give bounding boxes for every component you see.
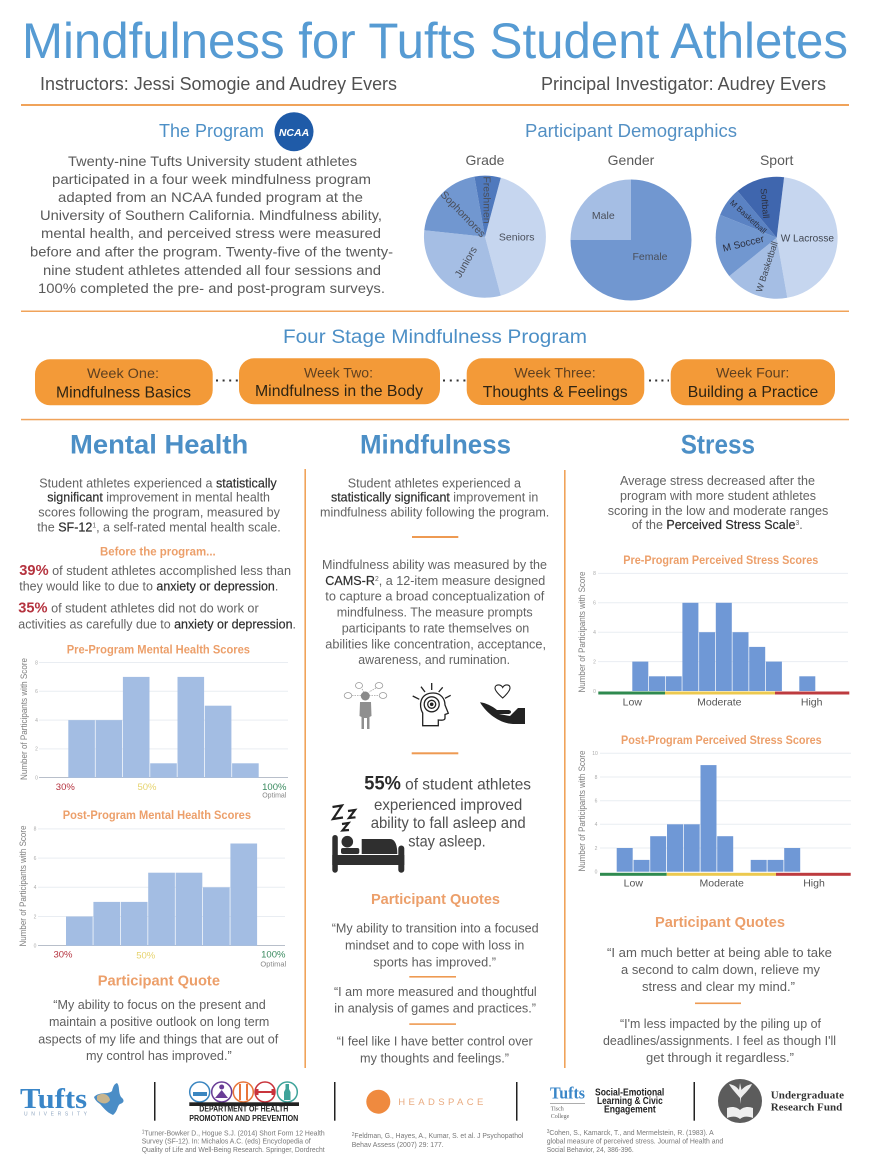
logo: Undergraduate Research Fund bbox=[718, 1079, 844, 1123]
CAMS-R description: mindfulness. The measure prompts bbox=[337, 604, 533, 619]
reference 2 bbox=[352, 1132, 524, 1149]
pie chart: grade bbox=[424, 152, 546, 298]
mental health summary: , a self-rated mental health scale. bbox=[96, 520, 281, 535]
program description: mental health, and perceived stress were measured bbox=[41, 225, 381, 241]
quotes: stress and clear my mind.” bbox=[642, 979, 795, 994]
pie chart: sport: Softball bbox=[759, 188, 771, 219]
reference 3: global measure of perceived stress. Journal of Health and bbox=[547, 1138, 723, 1146]
heading: mindfulness: Mindfulness bbox=[360, 429, 511, 459]
pie chart: sport: W Basketball bbox=[754, 240, 780, 293]
statistics: 39% of student athletes accomplished less than bbox=[19, 562, 291, 579]
stage: week four bbox=[671, 359, 835, 405]
bar chart: pre-program mental health: 6 bbox=[35, 689, 38, 695]
icon: bed bbox=[332, 835, 404, 873]
bar chart: pre-program perceived stress: Number of Participants with Score bbox=[577, 572, 587, 692]
stage: week three: Thoughts & Feelings bbox=[483, 384, 628, 401]
heading: participant quotes: Participant Quotes bbox=[371, 891, 500, 908]
pie chart: sport: M Basketball bbox=[728, 198, 768, 236]
before the program heading: Before the program... bbox=[100, 547, 216, 559]
bar chart: post-program mental health: 8 bbox=[34, 827, 37, 833]
stage: week four: Week Four: bbox=[716, 365, 789, 381]
stress summary: scoring in the low and moderate ranges bbox=[608, 503, 829, 518]
program description: before and after the program. Twenty-five of the twenty- bbox=[30, 244, 393, 260]
logo: Tufts University: Tufts bbox=[20, 1083, 87, 1115]
stage: week three: Week Three: bbox=[514, 365, 596, 381]
heading: four stage mindfulness program: Four Stage Mindfulness Program bbox=[283, 327, 587, 348]
mindfulness summary bbox=[320, 475, 549, 520]
bar chart: pre-program perceived stress: Moderate bbox=[697, 697, 742, 709]
connector bbox=[443, 380, 466, 382]
mental health summary: the SF-12 bbox=[37, 520, 94, 535]
icon: NCAA logo: NCAA bbox=[279, 127, 309, 139]
bar chart: post-program mental health: Number of Participants with Score bbox=[18, 826, 28, 946]
program description: adapted from an NCAA funded program at the bbox=[58, 189, 363, 205]
mental health summary: 1 bbox=[92, 523, 96, 530]
principal investigator: Principal Investigator: Audrey Evers bbox=[541, 74, 826, 94]
connector bbox=[216, 380, 238, 382]
bar chart: pre-program mental health: 100% bbox=[262, 782, 287, 793]
logo: Tufts Tisch College SEL: College bbox=[551, 1114, 570, 1120]
logo: Tufts Tisch College SEL: Tisch bbox=[551, 1107, 564, 1113]
reference 3: Cohen, S., Kamarck, T., and Mermelstein, R. (1983). A bbox=[549, 1130, 714, 1137]
bar chart: post-program perceived stress: Moderate bbox=[700, 878, 744, 890]
bar chart: pre-program mental health: 2 bbox=[35, 747, 38, 753]
logo: Department of Health Promotion and Prevention bbox=[189, 1082, 299, 1123]
logo: Tufts Tisch College SEL: Learning & Civic bbox=[597, 1095, 663, 1107]
logo: Department of Health Promotion and Prevention: PROMOTION AND PREVENTION bbox=[189, 1114, 298, 1123]
bar chart: pre-program mental health: Pre-Program Mental Health Scores bbox=[67, 644, 250, 656]
quotes: mindset and to cope with loss in bbox=[345, 937, 524, 952]
pie chart: sport: Sport bbox=[760, 152, 794, 168]
sleep statistic: 55% of student athletes bbox=[364, 773, 531, 794]
pie chart: grade: Sophomores bbox=[438, 189, 488, 240]
heading: mental health: Mental Health bbox=[70, 429, 248, 459]
mindfulness summary: statistically significant improvement in bbox=[331, 490, 538, 505]
panel: stress bbox=[577, 429, 851, 1065]
reference 1: Turner-Bowker D., Hogue S.J. (2014) Short Form 12 Health bbox=[144, 1130, 325, 1137]
reference 2: 2 bbox=[352, 1132, 355, 1138]
CAMS-R description bbox=[322, 557, 547, 667]
stress summary: program with more student athletes bbox=[620, 488, 816, 503]
sleep statistic: experienced improved bbox=[374, 797, 522, 814]
pie chart: sport bbox=[716, 152, 838, 299]
panel: the program bbox=[30, 112, 393, 296]
logo: Department of Health Promotion and Prevention: DEPARTMENT OF HEALTH bbox=[199, 1105, 288, 1114]
pie chart: gender bbox=[570, 152, 691, 300]
quotes: “I am more measured and thoughtful bbox=[334, 984, 537, 999]
pie chart: grade: Juniors bbox=[453, 245, 480, 280]
reference 3 bbox=[547, 1129, 723, 1154]
pie chart: gender: Female bbox=[632, 251, 668, 263]
program description: participated in a four week mindfulness program bbox=[52, 171, 371, 187]
quote: maintain a positive outlook on long term bbox=[49, 1014, 269, 1029]
bar chart: post-program perceived stress: High bbox=[803, 878, 825, 890]
bar chart: post-program mental health bbox=[18, 810, 287, 968]
bar chart: post-program mental health: 50% bbox=[136, 950, 156, 961]
logo: Tufts University bbox=[20, 1083, 124, 1118]
stress summary: Average stress decreased after the bbox=[620, 473, 815, 488]
reference 3: Social Behavior, 24, 386-396. bbox=[547, 1147, 634, 1154]
program description: 100% completed the pre- and post-program surveys. bbox=[38, 280, 385, 296]
bar chart: post-program mental health: Optimal bbox=[260, 960, 287, 968]
statistics: activities as carefully due to anxiety or depression. bbox=[18, 616, 296, 631]
bar chart: pre-program mental health: Number of Participants with Score bbox=[19, 658, 29, 780]
icon: NCAA logo bbox=[274, 112, 314, 151]
reference 1: 1 bbox=[142, 1129, 145, 1135]
CAMS-R description: CAMS-R bbox=[325, 573, 375, 588]
mental health summary: Student athletes experienced a statistically bbox=[39, 475, 277, 490]
heading: participant demographics: Participant Demographics bbox=[525, 121, 737, 141]
icon: zzz bbox=[332, 806, 356, 830]
quotes: get through it regardless.” bbox=[646, 1050, 794, 1065]
stage: week one: Week One: bbox=[87, 365, 159, 381]
icon: head with target bbox=[413, 683, 451, 726]
quotes: “I am much better at being able to take bbox=[607, 945, 832, 960]
pie chart: grade: Seniors bbox=[499, 232, 535, 244]
mindfulness summary: mindfulness ability following the program. bbox=[320, 505, 549, 520]
bar chart: pre-program perceived stress: 6 bbox=[593, 601, 596, 607]
reference 1 bbox=[142, 1129, 325, 1154]
mental health summary: scores following the program, measured by bbox=[38, 505, 280, 520]
bar chart: post-program mental health: 2 bbox=[34, 914, 37, 920]
quote: “My ability to focus on the present and bbox=[53, 997, 266, 1012]
logo: Tufts Tisch College SEL: Tufts bbox=[550, 1083, 585, 1102]
pie chart: gender: Gender bbox=[608, 152, 655, 168]
bar chart: pre-program perceived stress bbox=[577, 555, 849, 709]
bar chart: pre-program perceived stress: 8 bbox=[593, 571, 596, 577]
sleep statistic bbox=[364, 773, 531, 851]
quotes bbox=[332, 921, 539, 1066]
icon: hand holding heart bbox=[480, 685, 525, 724]
quotes: a second to calm down, relieve my bbox=[621, 962, 820, 977]
program description: Twenty-nine Tufts University student athletes bbox=[68, 153, 357, 169]
panel: four stage program bbox=[35, 327, 835, 405]
bar chart: pre-program mental health: 8 bbox=[35, 660, 38, 666]
quotes: sports has improved.” bbox=[373, 955, 496, 970]
quote bbox=[38, 997, 279, 1063]
bar chart: post-program perceived stress: 0 bbox=[595, 870, 598, 876]
logo: Undergraduate Research Fund: Research Fund bbox=[771, 1102, 842, 1114]
bar chart: pre-program perceived stress: Pre-Program Perceived Stress Scores bbox=[623, 555, 818, 567]
quotes bbox=[603, 945, 836, 1065]
logo: Headspace bbox=[366, 1090, 483, 1114]
bar chart: pre-program mental health: 50% bbox=[137, 782, 157, 793]
CAMS-R description: abilities like concentration, acceptance, bbox=[325, 636, 546, 651]
connector bbox=[649, 380, 669, 382]
bar chart: post-program perceived stress: Post-Program Perceived Stress Scores bbox=[621, 735, 822, 747]
heading: participant quotes: Participant Quotes bbox=[655, 914, 785, 931]
instructors: Instructors: Jessi Somogie and Audrey Evers bbox=[40, 74, 397, 94]
stage: week one: Mindfulness Basics bbox=[56, 385, 191, 402]
bar chart: post-program mental health: 30% bbox=[53, 949, 73, 960]
stress summary: 3 bbox=[795, 520, 799, 527]
bar chart: pre-program perceived stress: High bbox=[801, 697, 823, 709]
heading: stress: Stress bbox=[681, 429, 755, 459]
bar chart: post-program perceived stress: 8 bbox=[595, 775, 598, 781]
bar chart: pre-program perceived stress: 4 bbox=[593, 630, 596, 636]
title: Mindfulness for Tufts Student Athletes bbox=[22, 13, 848, 69]
CAMS-R description: to capture a broad conceptualization of bbox=[325, 588, 545, 603]
reference 1: Survey (SF-12). In: Michalos A.C. (eds) Encyclopedia of bbox=[142, 1139, 311, 1146]
logo: Headspace: HEADSPACE bbox=[398, 1097, 483, 1108]
stress summary bbox=[608, 473, 829, 532]
quotes: “I'm less impacted by the piling up of bbox=[620, 1016, 821, 1031]
bar chart: post-program mental health: 0 bbox=[34, 944, 37, 950]
pie chart: sport: W Lacrosse bbox=[781, 232, 834, 244]
bar chart: post-program perceived stress: 4 bbox=[595, 822, 598, 828]
statistics: they would like to due to anxiety or depression. bbox=[19, 579, 278, 594]
reference 3: 3 bbox=[547, 1129, 550, 1135]
stage: week one bbox=[35, 359, 213, 405]
CAMS-R description: Mindfulness ability was measured by the bbox=[322, 557, 547, 572]
logo: Tufts Tisch College SEL: Engagement bbox=[604, 1104, 656, 1116]
logo: Tufts Tisch College SEL bbox=[550, 1083, 664, 1120]
sleep statistic: stay asleep. bbox=[408, 834, 486, 851]
pie chart: sport: M Soccer bbox=[722, 234, 766, 255]
heading: participant quote: Participant Quote bbox=[98, 972, 220, 989]
pie chart: gender: Male bbox=[592, 210, 615, 222]
bar chart: post-program perceived stress bbox=[577, 735, 851, 890]
quotes: deadlines/assignments. I feel as though I'll bbox=[603, 1033, 836, 1048]
icon: person with thoughts bbox=[344, 682, 387, 729]
CAMS-R description: participants to rate themselves on bbox=[342, 620, 529, 635]
reference 2: Behav Assess (2007) 29: 177. bbox=[352, 1142, 444, 1149]
mindfulness summary: Student athletes experienced a bbox=[348, 475, 522, 490]
bar chart: post-program perceived stress: 10 bbox=[592, 751, 598, 757]
CAMS-R description: , a 12-item measure designed bbox=[379, 573, 545, 588]
CAMS-R description: awareness, and rumination. bbox=[358, 652, 510, 667]
CAMS-R description: 2 bbox=[375, 576, 379, 583]
sleep statistic: ability to fall asleep and bbox=[371, 815, 526, 832]
statistics bbox=[18, 562, 296, 631]
panel: footer logos and references bbox=[20, 1079, 844, 1154]
bar chart: post-program perceived stress: 2 bbox=[595, 846, 598, 852]
stage: week two bbox=[239, 358, 440, 404]
quotes: “I feel like I have better control over bbox=[337, 1033, 533, 1048]
panel: mental health bbox=[18, 429, 296, 1063]
quotes: my thoughts and feelings.” bbox=[360, 1051, 509, 1066]
bar chart: post-program mental health: 6 bbox=[34, 856, 37, 862]
bar chart: pre-program perceived stress: 0 bbox=[593, 689, 596, 695]
bar chart: post-program perceived stress: Low bbox=[624, 878, 643, 890]
quote: my control has improved.” bbox=[86, 1048, 232, 1063]
stress summary: . bbox=[799, 517, 803, 532]
bar chart: post-program mental health: 100% bbox=[261, 949, 286, 960]
panel: mindfulness bbox=[320, 429, 549, 1066]
bar chart: pre-program perceived stress: Low bbox=[623, 697, 642, 709]
logo: Tufts University: UNIVERSITY bbox=[24, 1112, 88, 1118]
statistics: 35% of student athletes did not do work or bbox=[18, 600, 259, 617]
stress summary: of the Perceived Stress Scale bbox=[632, 517, 801, 532]
pie chart: grade: Freshmen bbox=[481, 176, 493, 224]
stage: week three bbox=[467, 358, 644, 405]
bar chart: post-program mental health: Post-Program Mental Health Scores bbox=[63, 810, 251, 822]
bar chart: pre-program mental health: Optimal bbox=[262, 792, 287, 800]
bar chart: pre-program mental health: 30% bbox=[56, 782, 75, 793]
mental health summary: significant improvement in mental health bbox=[47, 490, 270, 505]
reference 2: Feldman, G., Hayes, A., Kumar, S. et al. J Psychopathol bbox=[354, 1133, 524, 1140]
reference 1: Quality of Life and Well-Being Research. Springer, Dordrecht bbox=[142, 1147, 325, 1154]
panel: participant demographics bbox=[424, 121, 838, 300]
bar chart: post-program mental health: 4 bbox=[34, 885, 37, 891]
bar chart: pre-program perceived stress: 2 bbox=[593, 659, 596, 665]
heading: the program: The Program bbox=[159, 121, 264, 141]
stage: week two: Week Two: bbox=[304, 365, 373, 381]
stage: week two: Mindfulness in the Body bbox=[255, 383, 423, 400]
bar chart: pre-program mental health: 4 bbox=[35, 718, 38, 724]
logo: Undergraduate Research Fund: Undergraduate bbox=[771, 1089, 844, 1101]
bar chart: post-program perceived stress: Number of Participants with Score bbox=[577, 750, 587, 872]
logo: Tufts Tisch College SEL: Social-Emotional bbox=[595, 1086, 664, 1098]
bar chart: pre-program mental health: 0 bbox=[35, 776, 38, 782]
mental health summary bbox=[37, 475, 281, 535]
program description: University of Southern California. Mindfulness ability, bbox=[40, 207, 382, 223]
bar chart: pre-program mental health bbox=[19, 644, 288, 800]
pie chart: grade: Grade bbox=[466, 152, 505, 168]
program description: nine student athletes attended all four sessions and bbox=[43, 262, 381, 278]
bar chart: post-program perceived stress: 6 bbox=[595, 798, 598, 804]
quotes: “My ability to transition into a focused bbox=[332, 921, 539, 936]
quote: aspects of my life and things that are out of bbox=[38, 1031, 279, 1046]
stage: week four: Building a Practice bbox=[688, 384, 818, 401]
program description bbox=[30, 153, 393, 296]
quotes: in analysis of games and practices.” bbox=[334, 1001, 536, 1016]
